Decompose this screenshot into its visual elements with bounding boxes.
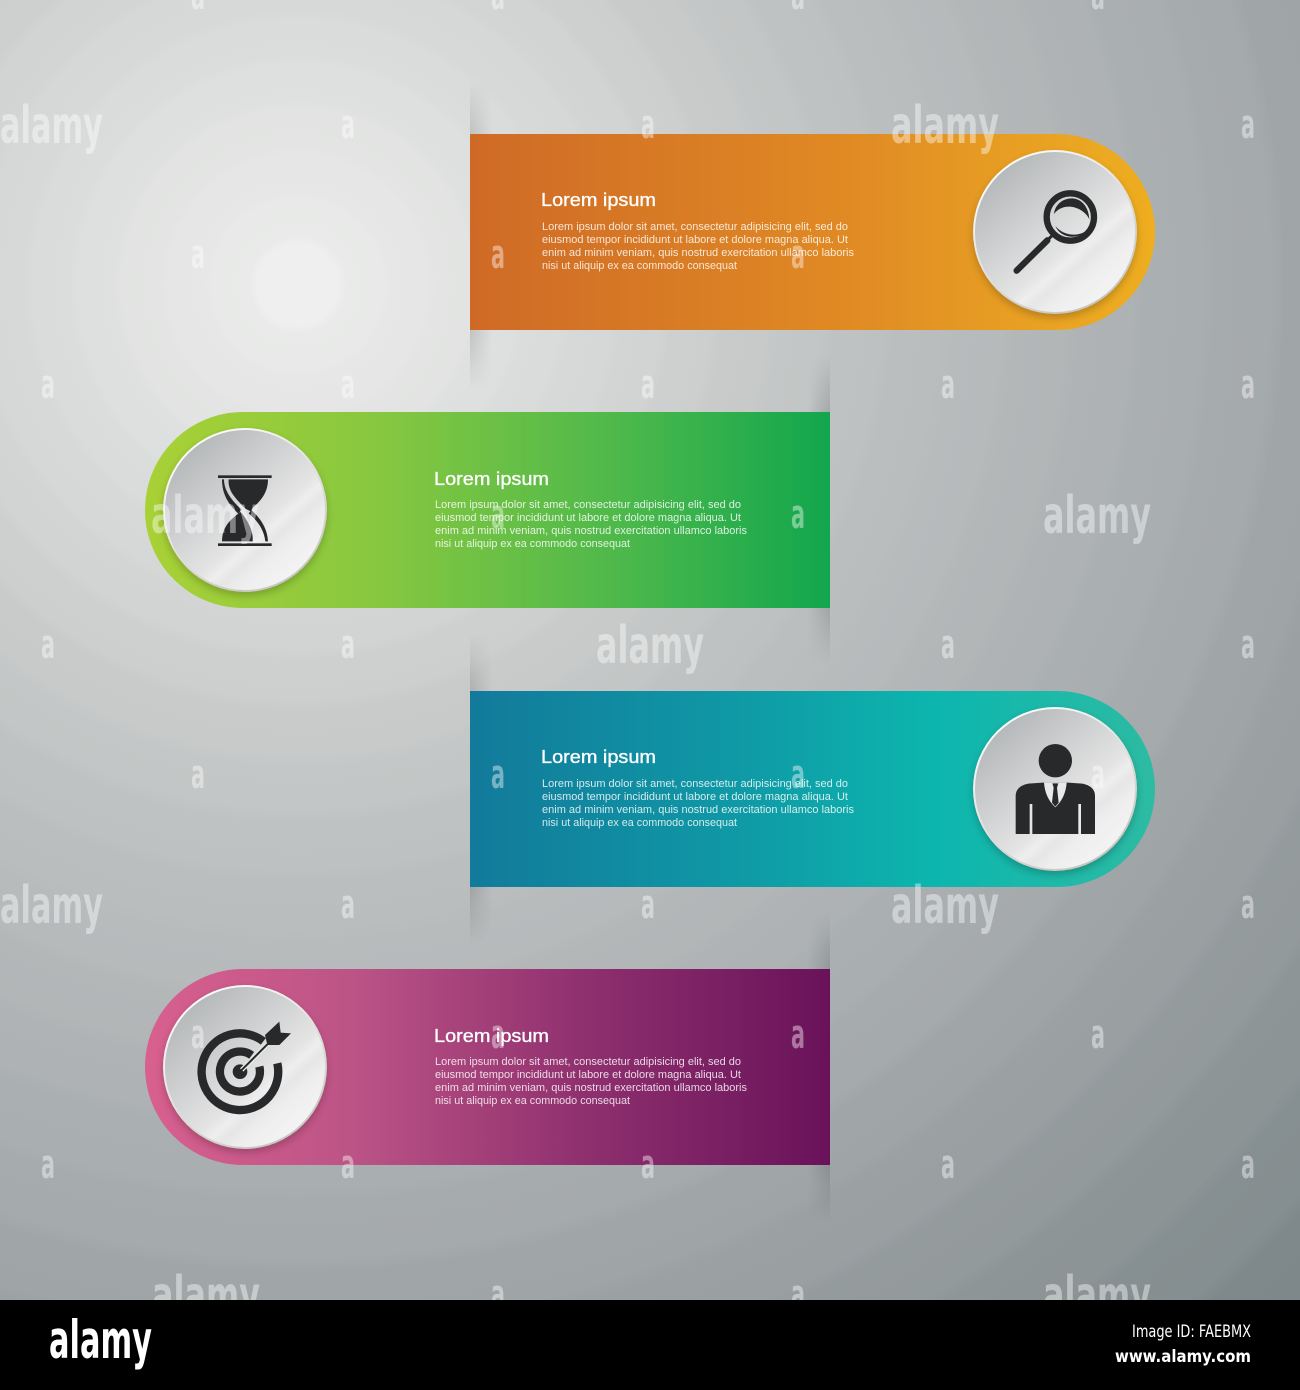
icon: business person	[1016, 744, 1095, 834]
watermarks: a	[941, 1142, 955, 1188]
disc: orange	[973, 150, 1137, 318]
watermarks: a	[341, 102, 355, 148]
icon: hourglass	[218, 475, 272, 546]
text block: pink: enim ad minim veniam, quis nostrud exercitation ullamco laboris	[435, 1082, 747, 1094]
text block: orange: nisi ut aliquip ex ea commodo consequat	[542, 260, 737, 272]
watermarks: a	[1241, 362, 1255, 408]
watermarks: a	[41, 1142, 55, 1188]
watermarks: a	[491, 1012, 505, 1058]
watermarks: a	[791, 1012, 805, 1058]
text block: pink	[435, 1056, 747, 1107]
panel: pink ribbon	[145, 969, 830, 1165]
panel: orange ribbon	[470, 134, 1155, 330]
text block: pink: nisi ut aliquip ex ea commodo consequat	[435, 1095, 630, 1107]
heading: orange: Lorem ipsum	[541, 189, 656, 210]
text block: teal: eiusmod tempor incididunt ut labore et dolore magna aliqua. Ut	[542, 791, 848, 803]
watermarks: a	[41, 622, 55, 668]
text block: teal	[542, 778, 854, 829]
icon: magnifying glass	[1017, 193, 1094, 271]
watermarks: a	[1241, 882, 1255, 928]
footer logo: alamy	[49, 1310, 152, 1371]
watermarks: a	[1241, 102, 1255, 148]
text block: orange: enim ad minim veniam, quis nostrud exercitation ullamco laboris	[542, 247, 854, 259]
watermarks: a	[791, 1272, 805, 1318]
panel: teal ribbon	[470, 691, 1155, 887]
footer bar	[0, 1300, 1300, 1390]
watermarks: a	[641, 102, 655, 148]
watermarks: alamy	[891, 876, 999, 936]
watermarks: a	[191, 232, 205, 278]
text block: orange: Lorem ipsum dolor sit amet, consectetur adipisicing elit, sed do	[542, 221, 848, 233]
watermarks: a	[791, 752, 805, 798]
watermarks: a	[1091, 1012, 1105, 1058]
watermarks: a	[341, 1142, 355, 1188]
image id: Image ID: FAEBMX	[1132, 1322, 1251, 1342]
fold shadows behind ribbons	[470, 80, 830, 1222]
watermarks: a	[341, 622, 355, 668]
watermarks: alamy	[1043, 486, 1151, 546]
watermarks: a	[341, 362, 355, 408]
text block: pink: Lorem ipsum dolor sit amet, consectetur adipisicing elit, sed do	[435, 1056, 741, 1068]
heading: pink: Lorem ipsum	[434, 1025, 549, 1046]
watermarks: a	[1241, 1142, 1255, 1188]
watermarks: alamy	[152, 1266, 260, 1326]
watermarks: a	[491, 1272, 505, 1318]
watermarks: a	[941, 622, 955, 668]
watermarks: a	[641, 362, 655, 408]
watermarks: a	[491, 752, 505, 798]
text block: green: Lorem ipsum dolor sit amet, consectetur adipisicing elit, sed do	[435, 499, 741, 511]
watermarks: alamy	[0, 96, 103, 156]
watermarks: a	[641, 882, 655, 928]
icon: target with arrow	[202, 1022, 291, 1110]
text block: teal: enim ad minim veniam, quis nostrud exercitation ullamco laboris	[542, 804, 854, 816]
watermarks: alamy	[1043, 1266, 1151, 1326]
watermarks: alamy	[891, 96, 999, 156]
watermarks: a	[941, 362, 955, 408]
text block: green: nisi ut aliquip ex ea commodo consequat	[435, 538, 630, 550]
watermarks: alamy	[0, 876, 103, 936]
watermarks: a	[191, 1012, 205, 1058]
watermarks: alamy	[596, 616, 704, 676]
text block: orange	[542, 221, 854, 272]
watermarks: a	[641, 1142, 655, 1188]
text block: green: eiusmod tempor incididunt ut labore et dolore magna aliqua. Ut	[435, 512, 741, 524]
watermarks: a	[491, 232, 505, 278]
website: www.alamy.com	[1115, 1347, 1251, 1367]
watermarks: alamy	[151, 486, 259, 546]
panel: green ribbon	[145, 412, 830, 608]
text block: green	[435, 499, 747, 550]
watermarks: a	[791, 492, 805, 538]
watermarks: a	[791, 232, 805, 278]
watermarks: a	[1091, 752, 1105, 798]
watermarks: a	[191, 752, 205, 798]
watermarks: a	[341, 882, 355, 928]
watermarks: a	[41, 362, 55, 408]
text block: pink: eiusmod tempor incididunt ut labore et dolore magna aliqua. Ut	[435, 1069, 741, 1081]
watermarks: a	[491, 492, 505, 538]
text block: teal: Lorem ipsum dolor sit amet, consectetur adipisicing elit, sed do	[542, 778, 848, 790]
text block: orange: eiusmod tempor incididunt ut labore et dolore magna aliqua. Ut	[542, 234, 848, 246]
text block: teal: nisi ut aliquip ex ea commodo consequat	[542, 817, 737, 829]
watermarks: a	[1241, 622, 1255, 668]
text block: green: enim ad minim veniam, quis nostrud exercitation ullamco laboris	[435, 525, 747, 537]
heading: teal: Lorem ipsum	[541, 746, 656, 767]
heading: green: Lorem ipsum	[434, 468, 549, 489]
disc: pink	[163, 985, 327, 1153]
disc: green	[163, 428, 327, 596]
disc: teal	[973, 707, 1137, 875]
